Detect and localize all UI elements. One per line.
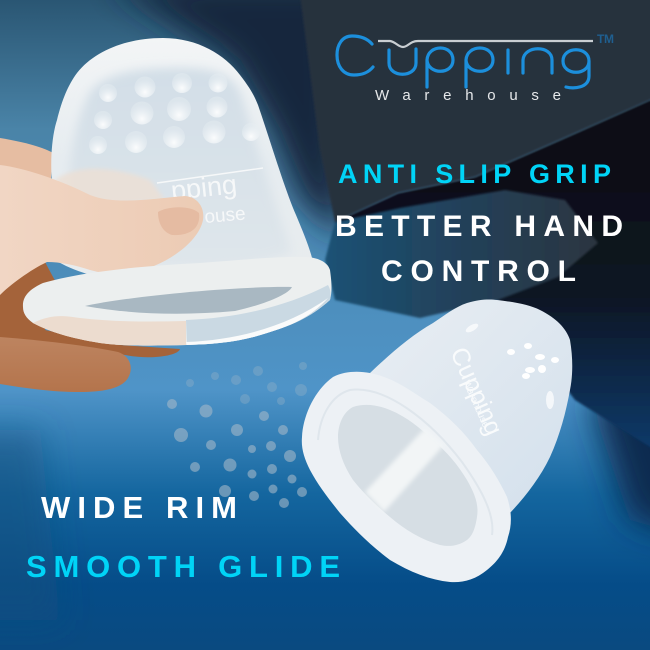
hand: thumb bbox=[0, 165, 203, 295]
photo: hand holding cup bbox=[0, 38, 332, 392]
cup opening bbox=[338, 405, 478, 546]
cup: rim bbox=[23, 257, 332, 346]
logo emboss: Cupping bbox=[445, 343, 508, 440]
heading: wide rim: WIDE RIM bbox=[41, 490, 237, 525]
logo wordmark bbox=[337, 36, 589, 88]
trademark: TM bbox=[597, 32, 614, 46]
heading: anti slip grip: ANTI SLIP GRIP bbox=[338, 159, 611, 189]
heading: smooth glide: SMOOTH GLIDE bbox=[26, 549, 340, 584]
cup body bbox=[370, 299, 572, 513]
logo: Cupping Warehouse bbox=[337, 32, 614, 104]
photo: second cup bbox=[302, 299, 572, 582]
dot pattern bbox=[167, 362, 307, 508]
cup: dome bbox=[51, 38, 313, 287]
logo swoosh bbox=[378, 41, 593, 47]
logo subtitle: Warehouse bbox=[375, 87, 561, 104]
cup: logo emboss: ouse bbox=[204, 203, 246, 228]
thumb nail bbox=[158, 207, 199, 235]
heading: better hand: BETTER HAND bbox=[335, 210, 623, 243]
heading: control: CONTROL bbox=[381, 255, 576, 288]
cup: logo emboss bbox=[157, 168, 263, 228]
hand: lower fingers bbox=[0, 138, 180, 392]
cup: grip bumps bbox=[89, 73, 260, 154]
wide rim bbox=[302, 372, 511, 582]
inner highlight bbox=[365, 428, 444, 512]
logo emboss: Warehouse bbox=[460, 379, 491, 430]
grip bumps bbox=[464, 322, 559, 409]
cup: logo emboss: pping bbox=[169, 169, 238, 206]
